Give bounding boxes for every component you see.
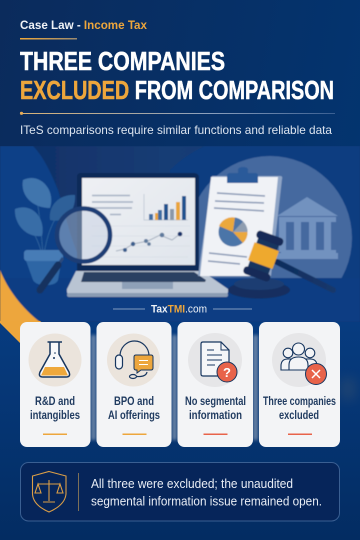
label: No segmental: [185, 396, 246, 408]
clipboard report: [198, 167, 282, 276]
gold swoosh: [0, 321, 60, 350]
pie chart: [218, 217, 248, 246]
bar chart: [144, 194, 188, 220]
icon: people with x badge: [281, 343, 326, 384]
label: BPO and: [114, 396, 154, 408]
header: [20, 20, 334, 137]
kicker: case law income tax: Case Law - Income Tax: [20, 20, 148, 32]
icon: document with question mark: ?: [223, 365, 231, 380]
callout text: segmental information issue remained open.: [91, 494, 322, 508]
label: R&D and: [35, 396, 75, 408]
hero illustration: [0, 146, 360, 322]
panel: three companies excluded: [259, 322, 340, 447]
lower background: [0, 322, 360, 540]
icon: shield with scales: [32, 472, 66, 512]
panel: r&d and intangibles: [20, 322, 90, 447]
icon: gavel: [228, 230, 333, 298]
label: Three companies: [263, 396, 336, 408]
panel: no segmental information: [178, 322, 253, 447]
subtitle: ITeS comparisons require similar functions and reliable data: [20, 123, 332, 137]
panel: bpo and ai offerings: [96, 322, 172, 447]
laptop: [67, 173, 228, 297]
icon: headset: [116, 341, 153, 378]
panel: conclusion callout: [20, 462, 340, 521]
brand: TaxTMI.com: TaxTMI.com: [151, 304, 207, 316]
label: excluded: [279, 410, 319, 422]
label: information: [189, 410, 242, 422]
icon: plant: [15, 178, 75, 285]
line chart: [92, 226, 190, 257]
title line one: THREE COMPANIES: [20, 46, 225, 76]
label: intangibles: [30, 410, 80, 422]
text lines on screen: [92, 196, 133, 214]
icon: institution building: [276, 197, 338, 259]
callout text: All three were excluded; the unaudited: [91, 477, 293, 491]
brand: TaxTMI.com: [113, 304, 252, 316]
icon: flask: [39, 342, 70, 377]
icon: magnifying glass: [40, 208, 110, 290]
label: AI offerings: [108, 410, 160, 422]
